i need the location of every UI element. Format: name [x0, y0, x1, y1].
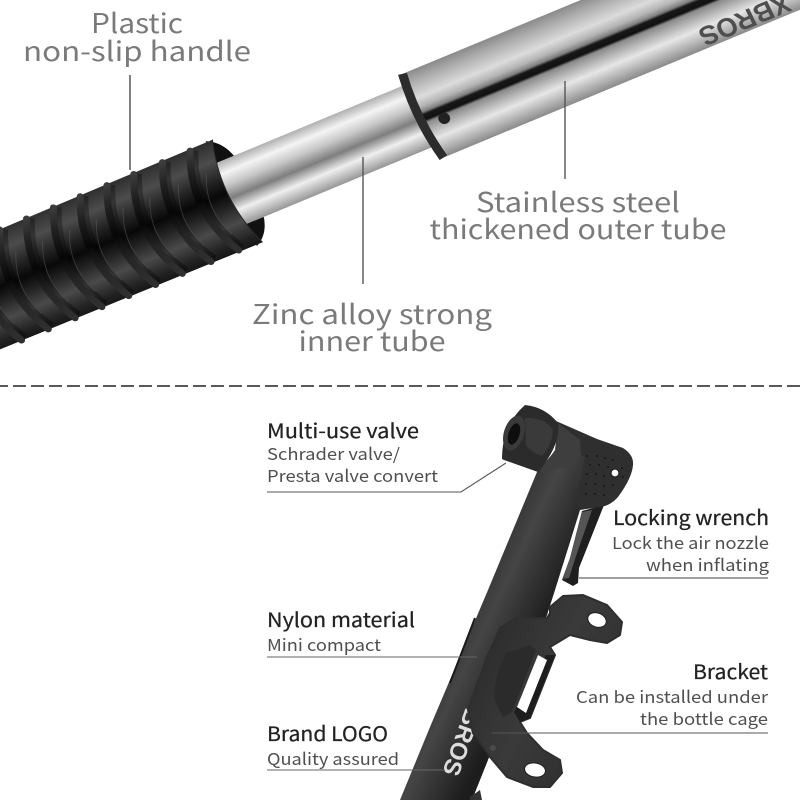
callout: nylon material: Mini compact — [267, 632, 381, 656]
collar — [540, 423, 581, 472]
callout: multi-use valve: Presta valve convert — [267, 463, 438, 487]
illustration: full pump — [400, 405, 633, 800]
callout: bracket: Bracket — [693, 656, 768, 685]
textured lever pad — [585, 455, 624, 496]
bracket lower hole — [523, 761, 547, 779]
callout: brand logo: Quality assured — [267, 746, 399, 770]
knurl highlight — [525, 418, 553, 456]
callout: locking wrench: Locking wrench — [613, 502, 769, 531]
bracket — [468, 595, 622, 787]
leader: inner tube — [362, 157, 364, 284]
label: stainless steel outer tube — [430, 181, 726, 247]
knurled valve cap — [502, 405, 558, 472]
callout: locking wrench — [579, 502, 770, 578]
leader: outer tube — [564, 81, 566, 179]
label: plastic non-slip handle — [23, 2, 251, 69]
lever hole — [611, 469, 619, 477]
callout: bracket: the bottle cage — [640, 706, 768, 730]
logo on pump body: BROS — [437, 705, 486, 779]
valve opening — [505, 422, 523, 446]
bracket slot frame — [514, 655, 555, 722]
callout: multi-use valve — [267, 415, 506, 492]
label: zinc alloy inner tube: inner tube — [298, 320, 446, 359]
inner zinc alloy tube — [204, 82, 443, 229]
label: zinc alloy inner tube: Zinc alloy strong — [252, 293, 492, 332]
callout: multi-use valve: Multi-use valve — [267, 415, 419, 444]
callout: multi-use valve: Schrader valve/ — [267, 441, 401, 465]
callout: nylon material — [267, 604, 477, 657]
body base fitting — [470, 790, 482, 800]
label: stainless steel outer tube: Stainless steel — [476, 181, 680, 220]
pump body — [400, 445, 588, 800]
illustration: top pump close-up — [0, 0, 800, 374]
bracket slot — [517, 655, 547, 713]
outer stainless steel tube — [399, 0, 800, 162]
side fin on body — [450, 618, 475, 683]
callout: locking wrench: Lock the air nozzle — [612, 530, 769, 554]
ribbed plastic handle — [0, 140, 263, 374]
callout: locking wrench: when inflating — [646, 552, 770, 576]
bracket inner recess — [494, 645, 536, 717]
elbow head — [556, 421, 633, 510]
bracket upper hole — [586, 610, 608, 630]
valve opening rim — [499, 413, 529, 453]
label: plastic non-slip handle: non-slip handle — [23, 30, 251, 69]
label: zinc alloy inner tube — [252, 293, 492, 359]
callout: brand logo: Brand LOGO — [267, 718, 388, 747]
callout: bracket: Can be installed under — [576, 684, 769, 708]
handle inner opening — [207, 135, 274, 245]
label: plastic non-slip handle: Plastic — [91, 2, 183, 41]
callout: bracket — [492, 656, 769, 733]
bracket fastener — [490, 745, 496, 751]
label: stainless steel outer tube: thickened outer tube — [430, 208, 726, 247]
locking wrench lever — [562, 505, 604, 586]
callout: nylon material: Nylon material — [267, 604, 415, 633]
leader: plastic handle — [129, 75, 131, 170]
callout: brand logo — [267, 718, 445, 770]
